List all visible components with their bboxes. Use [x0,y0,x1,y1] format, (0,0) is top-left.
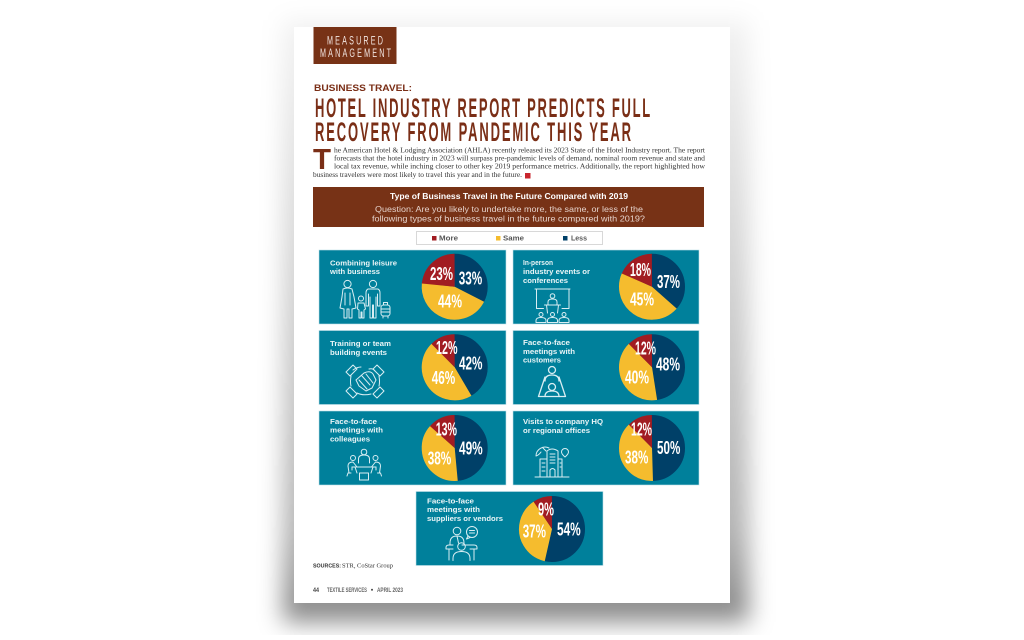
pie labels [428,420,483,468]
section badge: MEASURED [327,35,383,48]
kicker: BUSINESS TRAVEL: [314,83,412,93]
card: training or team building: Training or team [330,339,391,348]
pie chart: 49 38 13 [431,425,478,471]
sources note: SOURCES: [313,564,341,570]
icon: office building with globe and pin [535,447,569,477]
card: face-to-face customers: Face-to-face [523,338,570,347]
legend [416,232,602,244]
pie chart: 50 38 12 [629,425,675,471]
page footer: 44 [313,587,319,594]
page footer [313,587,403,594]
pie labels [625,420,680,467]
pie chart: 37 45 18 [629,263,675,310]
pie labels: 44% [438,292,462,312]
icon: two people at table [538,366,566,396]
icon: presenter and audience [535,289,570,322]
pie labels: 38% [625,447,648,467]
pie labels: 45% [630,290,654,310]
pie labels [630,260,680,310]
pie labels: 23% [430,264,453,284]
drop cap: T [313,144,331,176]
card: combining leisure with business: Combining leisure [330,258,397,268]
pie labels: 50% [657,438,680,458]
legend: Less [571,236,587,242]
card: training or team building: building events [330,348,387,357]
icon: meeting around table [347,449,382,480]
pie chart: 48 40 12 [629,344,675,391]
headline: HOTEL INDUSTRY REPORT PREDICTS FULL [315,94,650,123]
section badge [314,27,396,64]
pie labels: 42% [459,353,482,373]
card: training or team building [319,330,506,404]
chart header panel: Question: Are you likely to undertake more, the same, or less of the [375,204,643,214]
card: face-to-face suppliers: meetings with [427,505,481,514]
card: in-person industry events [513,250,699,324]
page content [313,27,706,594]
card: face-to-face colleagues: meetings with [330,426,384,435]
chart header panel: following types of business travel in the future compared with 2019? [372,214,645,224]
card: face-to-face colleagues: Face-to-face [330,417,377,426]
pie labels: 12% [635,338,656,358]
intro paragraph: business travelers were most likely to travel this year and in the future. [313,171,522,179]
card: in-person industry events: In-person [523,258,553,267]
card: visits to company HQ [513,411,699,485]
pie chart: 54 37 9 [529,506,575,552]
card: in-person industry events: industry events or [523,267,590,276]
end mark [525,173,530,178]
legend: Same [503,236,524,242]
icon: joined hands [346,365,384,398]
card: combining leisure with business: with business [329,267,380,276]
pie labels: 54% [557,520,581,540]
card: face-to-face colleagues: colleagues [330,435,370,444]
chart header panel: Type of Business Travel in the Future Compared with 2019 [390,191,628,201]
card: in-person industry events: conferences [523,276,568,285]
card: combining leisure with business [319,250,506,324]
card: face-to-face colleagues [319,411,506,485]
magazine page [294,27,730,603]
pie chart: 33 44 23 [432,264,477,309]
card: face-to-face customers: meetings with [523,347,576,356]
pie labels: 18% [630,260,651,280]
headline: RECOVERY FROM PANDEMIC THIS YEAR [315,118,631,147]
pie labels: 33% [459,268,482,288]
pie labels: 37% [657,272,680,292]
pie labels: 40% [625,367,649,387]
card: face-to-face customers [513,330,699,404]
section badge: MANAGEMENT [320,47,391,61]
page drop shadow [283,20,749,622]
intro paragraph: he American Hotel & Lodging Association (AHLA) recently released its 2023 State of the Hotel Industry report. The report [334,146,705,154]
pie labels: 12% [436,338,458,358]
page footer: TEXTILE SERVICES [327,587,367,594]
sources note: STR, CoStar Group [342,562,393,570]
pie labels: 12% [631,420,652,440]
pie labels: 37% [523,522,546,542]
intro paragraph: local tax revenue, while inching closer to other key 2019 performance metrics. Additionally, the report highlighted how [334,162,706,170]
card: face-to-face suppliers [416,492,603,566]
card: visits to company HQ: or regional offices [523,426,590,435]
pie chart: 42 46 12 [431,344,478,391]
headline [315,94,650,147]
pie labels: 48% [656,354,680,374]
card: visits to company HQ: Visits to company HQ [523,417,603,426]
card: face-to-face suppliers: Face-to-face [427,496,474,506]
pie labels: 13% [436,420,457,440]
intro paragraph: forecasts that the hotel industry in 2023 will surpass pre-pandemic levels of demand, nominal room revenue and state and [334,154,705,162]
intro paragraph [313,144,706,179]
pie labels [430,264,482,312]
page footer: APRIL 2023 [377,587,403,594]
pie labels [625,338,680,387]
pie labels: 9% [538,500,554,520]
icon: family with luggage [340,280,390,318]
chart header panel [313,187,704,227]
pie labels [432,338,482,388]
pie labels: 46% [432,368,455,388]
card: face-to-face customers: customers [523,356,561,364]
pie labels: 38% [428,448,451,468]
legend: More [439,236,458,242]
icon: vendor meeting with speech bubble [446,526,478,560]
card: face-to-face suppliers: suppliers or vendors [427,514,503,523]
sources note [313,562,393,570]
pie labels: 49% [459,438,483,458]
pie labels [523,500,581,542]
